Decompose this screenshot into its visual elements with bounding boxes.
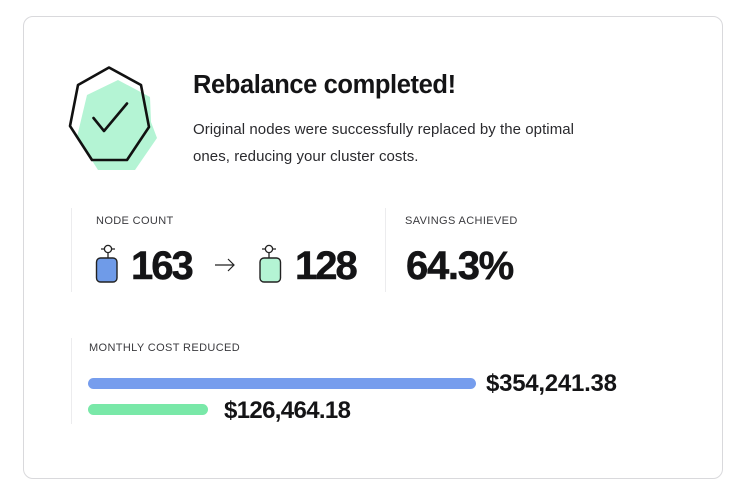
description text: Original nodes were successfully replaced by the optimal <box>193 121 574 138</box>
icon: blue node <box>96 244 118 283</box>
node count label: NODE COUNT <box>96 215 174 227</box>
bar: original cost <box>88 378 476 389</box>
description text <box>193 121 574 165</box>
original node count: 163 <box>131 244 192 288</box>
optimized node count: 128 <box>295 244 356 288</box>
bar: reduced cost <box>88 404 208 415</box>
icon: heptagon check badge <box>68 66 157 170</box>
description text: ones, reducing your cluster costs. <box>193 148 418 165</box>
savings value: 64.3% <box>406 244 513 288</box>
panel: monthly cost reduced <box>71 338 632 424</box>
monthly cost label: MONTHLY COST REDUCED <box>89 342 240 354</box>
arrow <box>215 258 235 272</box>
savings label: SAVINGS ACHIEVED <box>405 215 518 227</box>
title: Rebalance completed! <box>193 71 456 99</box>
icon: green node <box>259 244 282 283</box>
reduced cost value: $126,464.18 <box>224 397 350 424</box>
original cost value: $354,241.38 <box>486 370 617 397</box>
panel: node count <box>71 208 372 292</box>
panel: savings achieved <box>385 208 586 292</box>
